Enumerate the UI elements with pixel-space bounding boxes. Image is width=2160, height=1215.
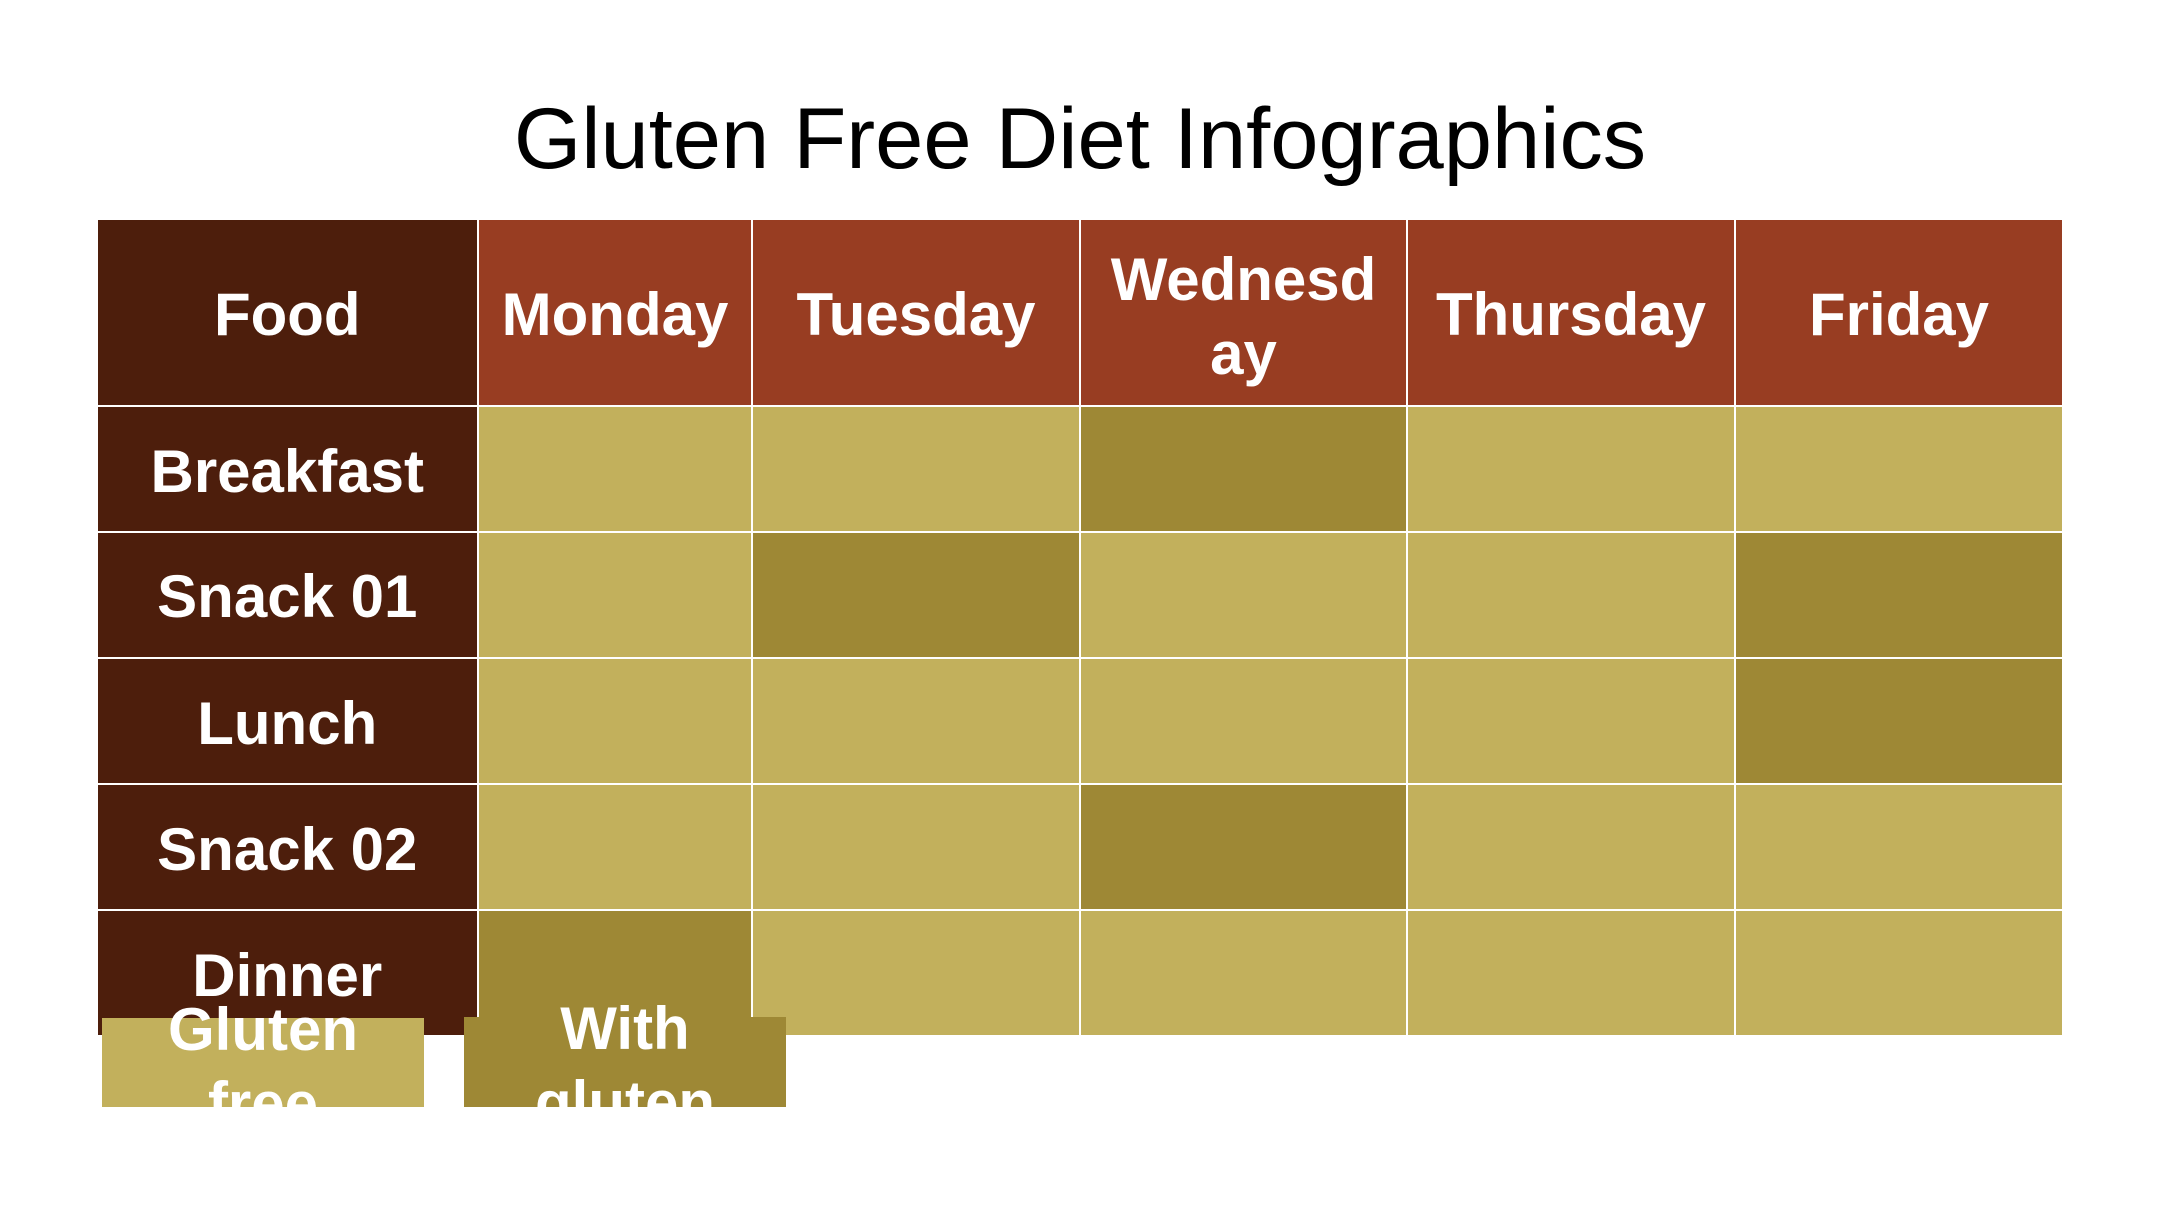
header: Food <box>98 220 477 405</box>
Dinner Wednesday: gluten free <box>1081 911 1406 1035</box>
row label: Dinner: Dinner <box>192 942 382 1009</box>
Dinner Tuesday: gluten free <box>753 911 1079 1035</box>
Lunch Friday: with gluten <box>1736 659 2062 783</box>
row label: Snack 01: Snack 01 <box>157 563 417 630</box>
Snack 01 Tuesday: with gluten <box>753 533 1079 657</box>
Snack 02 Friday: gluten free <box>1736 785 2062 909</box>
Dinner Monday: with gluten <box>479 911 751 1035</box>
legend: with gluten: With <box>560 995 690 1062</box>
row label: Snack 02 <box>98 785 477 909</box>
row label: Lunch <box>98 659 477 783</box>
Snack 01 Wednesday: gluten free <box>1081 533 1406 657</box>
Snack 01 Friday: with gluten <box>1736 533 2062 657</box>
row label: Dinner <box>98 911 477 1035</box>
row label: Breakfast: Breakfast <box>150 438 424 505</box>
Snack 02 Thursday: gluten free <box>1408 785 1734 909</box>
Lunch Monday: gluten free <box>479 659 751 783</box>
Dinner Thursday: gluten free <box>1408 911 1734 1035</box>
legend: with gluten: gluten <box>535 1069 715 1136</box>
Snack 01 Monday: gluten free <box>479 533 751 657</box>
Snack 02 Wednesday: with gluten <box>1081 785 1406 909</box>
Snack 01 Thursday: gluten free <box>1408 533 1734 657</box>
legend: gluten free <box>102 1018 424 1107</box>
header: Wednesday <box>1081 220 1406 405</box>
panel: weekly food table <box>98 220 2062 1035</box>
Dinner Friday: gluten free <box>1736 911 2062 1035</box>
Snack 02 Monday: gluten free <box>479 785 751 909</box>
header: Friday: Friday <box>1809 281 1989 348</box>
row label: Snack 01 <box>98 533 477 657</box>
header: Thursday <box>1408 220 1734 405</box>
Lunch Tuesday: gluten free <box>753 659 1079 783</box>
legend: gluten free: Gluten <box>168 996 358 1063</box>
header: Friday <box>1736 220 2062 405</box>
header: Tuesday: Tuesday <box>796 281 1035 348</box>
row label: Snack 02: Snack 02 <box>157 816 417 883</box>
header: Food: Food <box>214 281 361 348</box>
Lunch Wednesday: gluten free <box>1081 659 1406 783</box>
header: Tuesday <box>753 220 1079 405</box>
Lunch Thursday: gluten free <box>1408 659 1734 783</box>
Snack 02 Tuesday: gluten free <box>753 785 1079 909</box>
row label: Breakfast <box>98 407 477 531</box>
header: Wednesday: Wednesd <box>1111 246 1376 313</box>
header: Thursday: Thursday <box>1436 281 1706 348</box>
Breakfast Friday: gluten free <box>1736 407 2062 531</box>
Breakfast Wednesday: with gluten <box>1081 407 1406 531</box>
Breakfast Tuesday: gluten free <box>753 407 1079 531</box>
header: Wednesday: ay <box>1210 320 1277 387</box>
Breakfast Monday: gluten free <box>479 407 751 531</box>
title: Gluten Free Diet Infographics <box>514 91 1646 187</box>
row label: Lunch: Lunch <box>197 690 377 757</box>
Breakfast Thursday: gluten free <box>1408 407 1734 531</box>
legend: with gluten <box>464 1017 786 1107</box>
header: Monday: Monday <box>502 281 728 348</box>
legend: gluten free: free <box>208 1070 318 1137</box>
header: Monday <box>479 220 751 405</box>
